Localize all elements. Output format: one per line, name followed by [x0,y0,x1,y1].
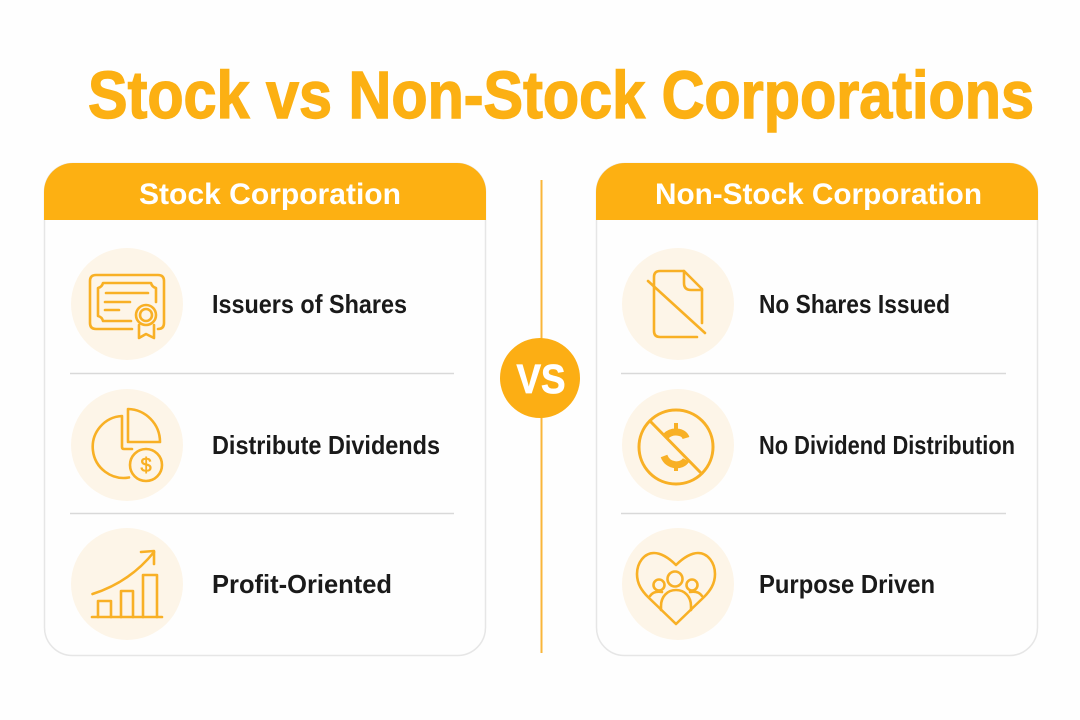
panel: stock corporation [44,163,486,656]
header: non-stock corporation: Non-Stock Corporation [655,178,982,211]
icon: no dividends [622,389,734,501]
label: issuers of shares: Issuers of Shares [212,289,407,319]
header: stock corporation [44,163,486,220]
icon: pie chart with dollar coin [71,389,183,501]
header: non-stock corporation [596,163,1038,220]
label: no shares issued: No Shares Issued [759,289,950,319]
icon: growth chart [71,528,183,640]
label: no dividend distribution: No Dividend Distribution [759,430,1015,460]
label: profit-oriented: Profit-Oriented [212,569,392,599]
label: purpose driven: Purpose Driven [759,569,935,599]
icon: crossed-out document [622,248,734,360]
icon: certificate [71,248,183,360]
icon: pie chart with dollar coin: $ [140,455,152,477]
panel: non-stock corporation [596,163,1038,656]
label: distribute dividends: Distribute Dividends [212,430,440,460]
vs badge: VS [516,356,566,402]
icon: heart with people [622,528,734,640]
divider line [540,180,542,653]
vs badge [500,338,580,418]
header: stock corporation: Stock Corporation [139,178,401,211]
